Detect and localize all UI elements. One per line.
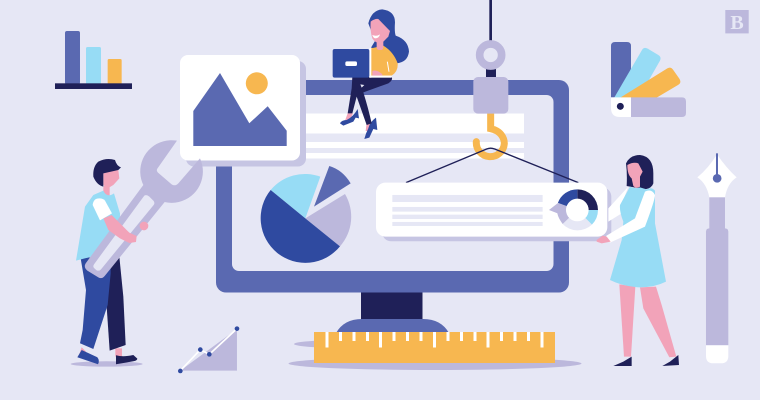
donut chart [549, 189, 598, 230]
monitor ground shadows [288, 340, 582, 370]
small line chart [178, 326, 239, 373]
ruler [314, 332, 555, 363]
colour swatch fan [611, 42, 686, 117]
hanging ropes [406, 148, 578, 183]
arm [103, 215, 137, 243]
image card [180, 55, 306, 166]
monitor [216, 80, 569, 333]
woman sitting with laptop [333, 9, 409, 139]
fountain pen [697, 153, 737, 363]
bar chart on shelf [55, 31, 132, 89]
pie chart [261, 166, 351, 263]
screen text lines [290, 114, 524, 158]
woman standing holding card [597, 155, 679, 366]
logo badge: B [730, 12, 744, 34]
logo badge [725, 10, 749, 34]
crane hook [473, 0, 508, 157]
man holding wrench [71, 140, 203, 367]
hanging data card [376, 183, 611, 241]
wrench [85, 140, 203, 278]
